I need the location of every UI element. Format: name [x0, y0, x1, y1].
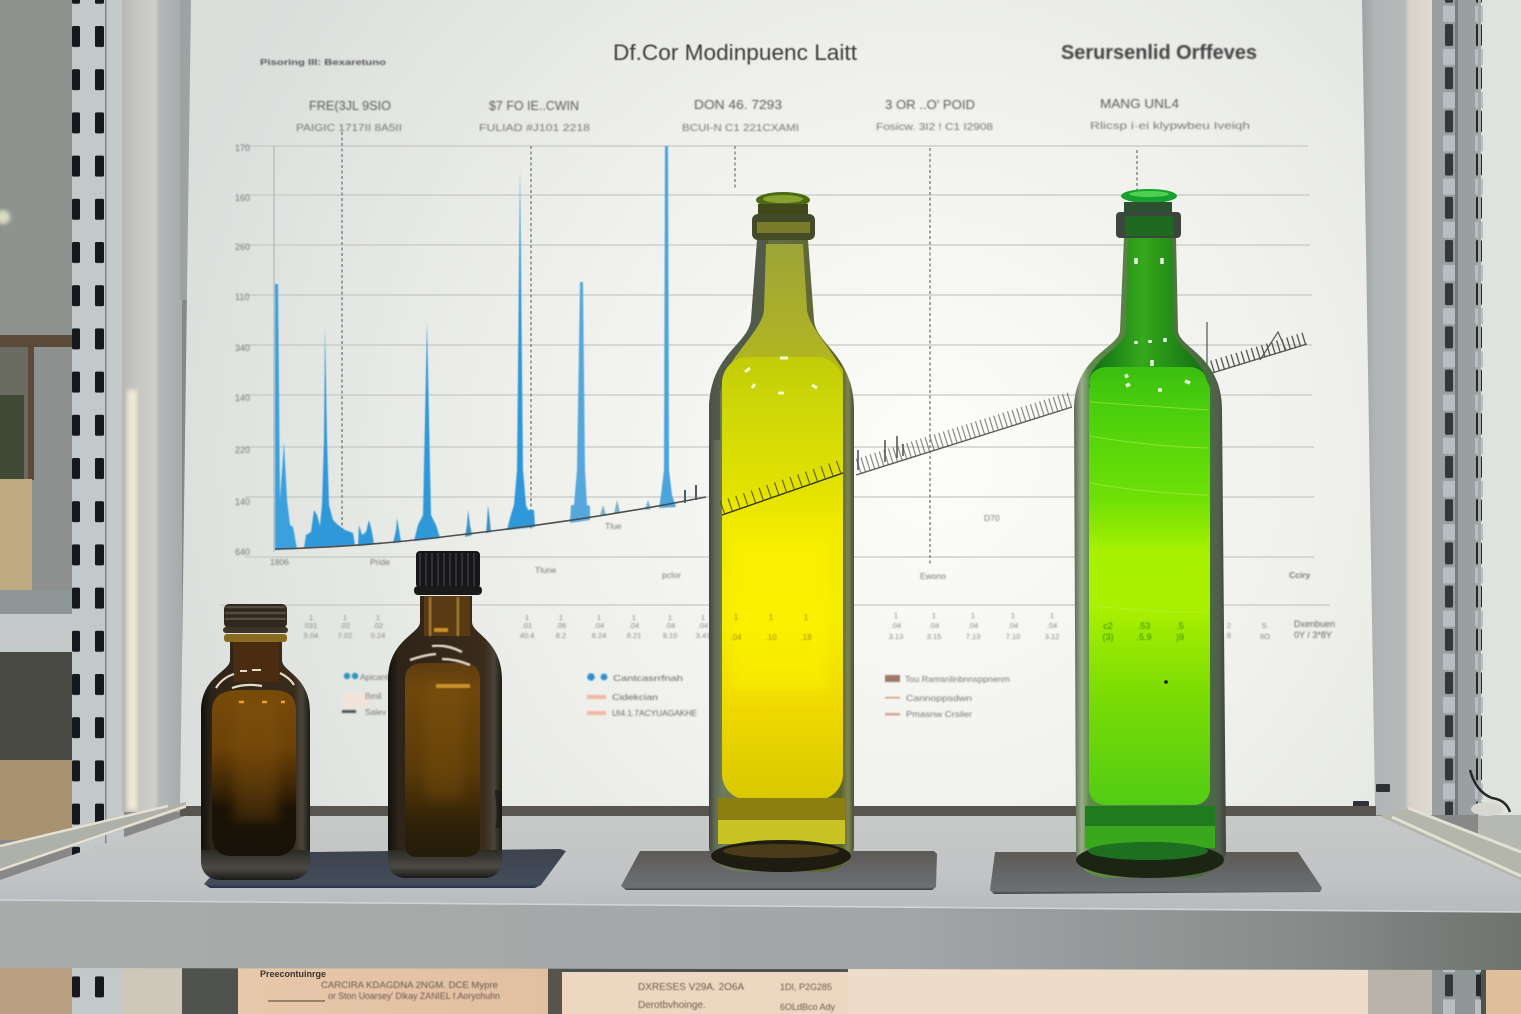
x axis tick table: 1	[668, 613, 672, 622]
left upright rack	[72, 0, 192, 1014]
ghost text through green glass: .5	[1176, 621, 1184, 631]
ghost text through yellow glass: .18	[800, 633, 812, 642]
column headers: DON 46. 7293	[694, 98, 782, 112]
legend left: Bmil	[365, 691, 382, 701]
legend centre: Cantcasrrfnah	[613, 673, 683, 683]
paper label left: or Ston Uoarsey' Dlkay ZANIEL f.Aoryohuhn	[328, 991, 500, 1001]
column headers: FULIAD #J101 2218	[479, 123, 591, 134]
x axis tick table: .04	[891, 621, 901, 630]
x axis tick table: S.	[1261, 621, 1269, 630]
ghost text through yellow glass: 1	[804, 613, 809, 622]
legend right: Pmasnw Crsiler	[906, 709, 972, 719]
y axis labels: 160	[235, 193, 250, 203]
legend left: Salev	[365, 707, 387, 717]
legend centre: Cidekcian	[612, 692, 658, 702]
x axis words: Ewono	[920, 571, 946, 581]
paper label right: DXRESES V29A. 2O6A	[638, 982, 744, 993]
column headers: Rlicsp i·ei klypwbeu Iveiqh	[1090, 121, 1250, 132]
column headers: FRE(3JL 9SIO	[309, 99, 391, 113]
ghost text through green glass: .53	[1138, 621, 1150, 631]
small amber bottle	[201, 604, 310, 880]
column headers: PAIGIC 1717II 8A5II	[296, 123, 402, 134]
x axis tick table: 40.4	[520, 631, 534, 640]
paper label left: CARCIRA KDAGDNA 2NGM. DCE Mypre	[321, 980, 498, 990]
large amber bottle	[388, 551, 502, 878]
x axis words: 1806	[270, 557, 289, 567]
y axis labels: 110	[235, 292, 249, 302]
x axis tick table: 3.41	[696, 631, 710, 640]
x axis tick table: 0.24	[371, 631, 385, 640]
x axis tick table: 8O	[1260, 632, 1270, 641]
x axis end note: Dxenbuen	[1294, 619, 1335, 629]
x axis tick table: 7.13	[966, 632, 980, 641]
y axis labels: 340	[235, 343, 250, 353]
x axis tick table: 1	[376, 613, 380, 622]
ghost text through green glass	[1102, 621, 1184, 642]
paper label right: 6OLdBco Ady	[780, 1002, 836, 1012]
x axis tick table: 8.21	[627, 631, 641, 640]
column headers: BCUI-N C1 221CXAMI	[682, 123, 799, 134]
legend right: Cannoppsdwn	[906, 693, 972, 703]
x axis tick table: 1	[1011, 611, 1015, 620]
ghost text through yellow glass	[730, 613, 812, 642]
x axis tick table: 1	[525, 613, 529, 622]
x axis end note	[1294, 619, 1335, 640]
x axis tick table: .04	[629, 621, 639, 630]
column headers: Fosicw. 3I2 ! C1 I2908	[876, 122, 994, 133]
x axis words: Tlue	[605, 521, 622, 531]
x axis tick table: .04	[698, 621, 708, 630]
x axis tick table: 1	[597, 613, 601, 622]
y axis labels: 140	[235, 393, 250, 403]
column headers: MANG UNL4	[1100, 97, 1179, 111]
x axis tick table	[304, 611, 1270, 641]
x axis end note: 0Y / 3*8Y	[1294, 630, 1332, 640]
ghost text through green glass: .5.9	[1136, 632, 1152, 642]
paper label left: Preecontuinrge	[260, 969, 326, 979]
x axis tick table: 3.13	[889, 632, 903, 641]
shelf	[0, 802, 1521, 970]
x axis tick table: .04	[594, 621, 604, 630]
background wall right	[1478, 0, 1521, 865]
green bottle	[1074, 189, 1226, 878]
main chart title: Df.Cor Modinpuenc Laitt	[613, 40, 857, 65]
dashed markers	[342, 132, 1137, 565]
legend centre	[587, 673, 697, 718]
x axis tick table: 5.04	[304, 631, 318, 640]
x axis tick table: 8	[1227, 631, 1231, 640]
panel clip marks	[1353, 784, 1390, 807]
coaster mats	[204, 849, 1322, 894]
x axis tick table: 7.10	[1006, 632, 1020, 641]
paper label right: Derotbvhoinge.	[638, 1000, 706, 1011]
x axis tick table: 1	[932, 611, 936, 620]
x axis tick table: .04	[929, 621, 939, 630]
ghost text through yellow glass: 1	[734, 613, 739, 622]
panel small header: Pisoring III: Bexaretuno	[260, 58, 386, 67]
x axis tick table: .04	[968, 621, 978, 630]
chart panel	[180, 0, 1390, 816]
legend right	[885, 674, 1010, 719]
x axis tick table: 2	[1227, 621, 1231, 630]
x axis tick table: 1	[1050, 611, 1054, 620]
ghost text through green glass: (3)	[1102, 632, 1114, 642]
y axis labels: 220	[235, 445, 250, 455]
blue spike series	[275, 146, 676, 550]
x axis words	[270, 513, 1311, 581]
column headers: 3 OR ..O' POID	[885, 98, 975, 112]
paper label left	[238, 968, 548, 1014]
chart grid	[220, 146, 1330, 605]
x axis tick table: 1	[632, 613, 636, 622]
legend right: Tou Ramsnlinbnnsppnenm	[905, 674, 1010, 684]
x axis tick table: 1	[309, 613, 313, 622]
background room left	[0, 0, 80, 840]
x axis tick table: 1	[894, 611, 898, 620]
ghost text through green glass: )9	[1176, 632, 1184, 642]
column headers	[296, 97, 1250, 134]
ghost text through yellow glass: 1	[769, 613, 774, 622]
x axis tick table: .04	[665, 621, 675, 630]
y axis labels	[235, 143, 250, 557]
x axis tick table: .06	[556, 621, 566, 630]
x axis tick table: .02	[340, 621, 350, 630]
panel back ledge	[180, 806, 1376, 816]
x axis words: pcIor	[662, 570, 681, 580]
paper label right	[562, 972, 848, 1014]
x axis tick table: 8.24	[592, 631, 606, 640]
y axis labels: 140	[235, 497, 250, 507]
yellow bottle	[709, 192, 854, 872]
y axis labels: 640	[235, 547, 250, 557]
x axis tick table: 3.12	[1045, 632, 1059, 641]
x axis words: Pride	[370, 557, 390, 567]
y axis labels: 170	[235, 143, 250, 153]
x axis tick table: .04	[1047, 621, 1057, 630]
ghost text through yellow glass: .10	[765, 633, 777, 642]
x axis tick table: .01	[522, 621, 532, 630]
x axis tick table: 9.10	[663, 631, 677, 640]
x axis words: Tlune	[535, 565, 557, 575]
ghost text through green glass: c2	[1103, 621, 1113, 631]
below-shelf area	[0, 960, 1521, 1014]
column headers: $7 FO IE..CWIN	[489, 99, 579, 113]
x axis words: Cciry	[1289, 570, 1311, 580]
legend left: Apicanta	[360, 672, 393, 682]
trend curve	[275, 322, 1307, 549]
x axis tick table: .02	[373, 621, 383, 630]
x axis tick table: .04	[1008, 621, 1018, 630]
x axis tick table: 1	[971, 611, 975, 620]
secondary title: Serursenlid Orffeves	[1061, 42, 1257, 64]
x axis tick table: 1	[559, 613, 563, 622]
x axis tick table: 1	[701, 613, 705, 622]
x axis words: D70	[984, 513, 1000, 523]
paper label right: 1DI, P2G285	[780, 982, 832, 992]
x axis tick table: 8.2	[556, 631, 566, 640]
y axis labels: 260	[235, 242, 250, 252]
ghost text through yellow glass: .04	[730, 633, 742, 642]
x axis tick table: 7.02	[338, 631, 352, 640]
x axis tick table: 1	[343, 613, 347, 622]
x axis tick table: 3.15	[927, 632, 941, 641]
legend left	[342, 672, 393, 717]
legend centre: UI4.1.7ACYUAGAKHE	[612, 708, 697, 718]
right upright rack	[1360, 0, 1510, 816]
x axis tick table: 031	[305, 621, 317, 630]
